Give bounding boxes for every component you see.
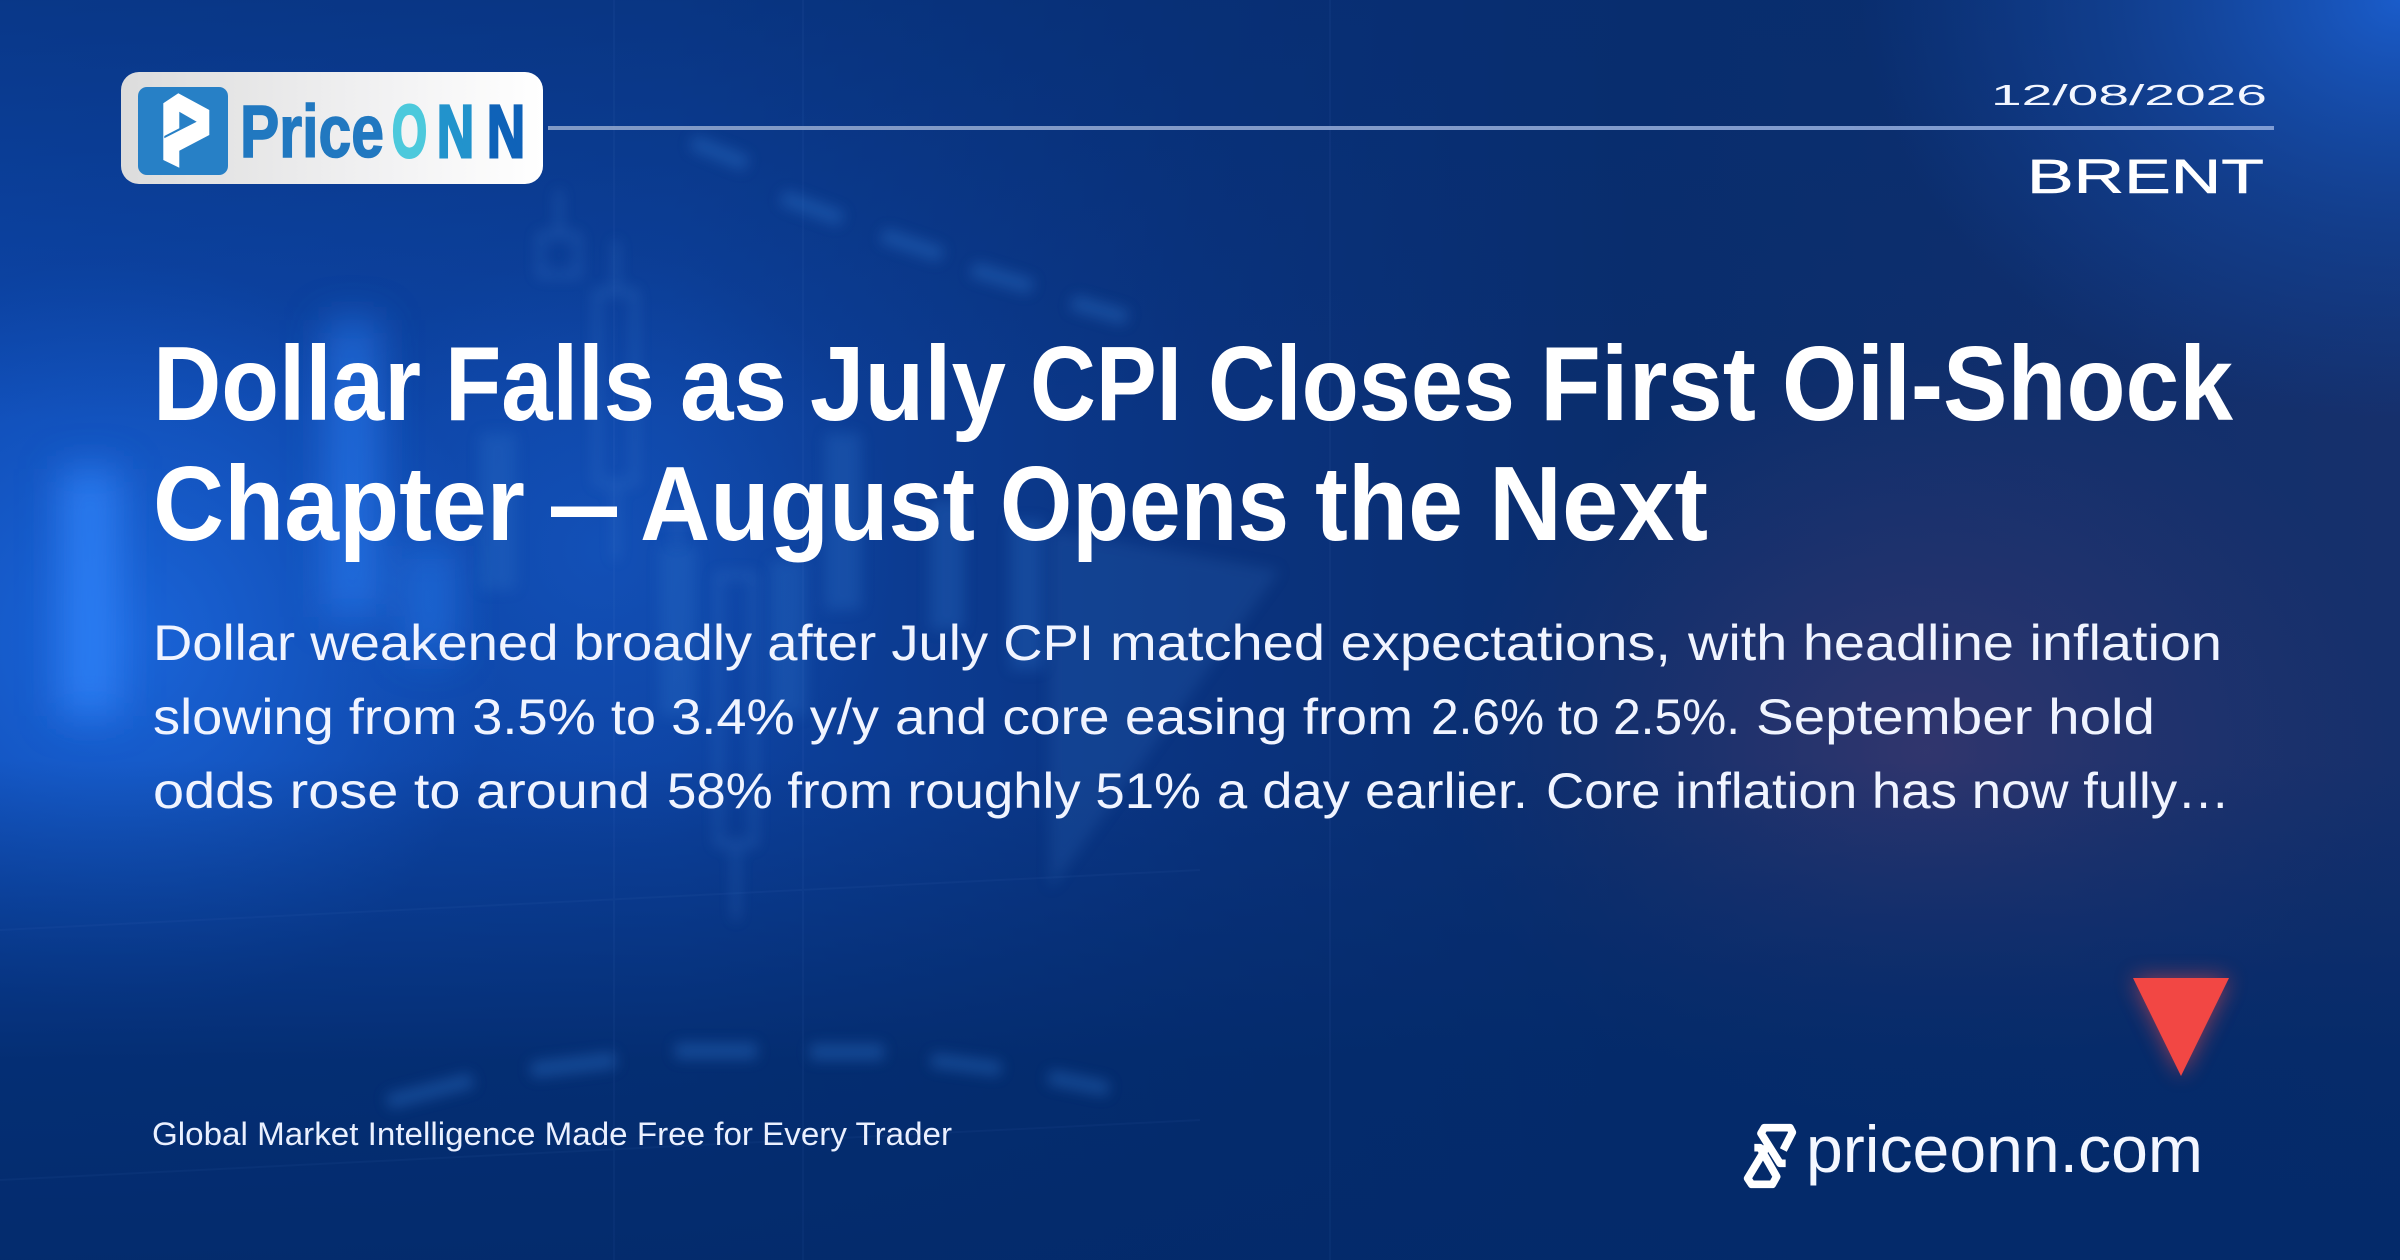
title: Dollar xyxy=(153,325,421,443)
logo wordmark: Price xyxy=(240,90,384,173)
summary paragraph: odds rose to around xyxy=(153,763,650,819)
title: Opens xyxy=(1000,445,1289,563)
title: the xyxy=(1315,445,1463,563)
summary paragraph: matched expectations, xyxy=(1110,615,1671,671)
date: 12/08/2026 xyxy=(1991,80,2267,112)
tagline: Global Market Intelligence Made Free for Every Trader xyxy=(152,1116,952,1152)
logo wordmark xyxy=(240,90,525,173)
summary paragraph: 58% from roughly 51% xyxy=(667,763,1201,819)
logo wordmark: N xyxy=(437,90,474,173)
logo wordmark: O xyxy=(392,90,427,173)
summary paragraph: with headline inflation xyxy=(1687,615,2222,671)
logo wordmark: N xyxy=(487,90,525,173)
symbol BRENT: BRENT xyxy=(2027,151,2264,204)
summary paragraph: Core inflation has now fully… xyxy=(1546,763,2230,819)
summary paragraph: slowing from 3.5% to 3.4% y/y xyxy=(153,689,879,745)
website: priceonn.com xyxy=(1806,1112,2203,1186)
title: Closes xyxy=(1208,325,1515,443)
summary paragraph: and core easing from xyxy=(895,689,1413,745)
title: First xyxy=(1540,325,1756,443)
header rule xyxy=(548,126,2274,130)
title: August xyxy=(640,445,975,563)
summary paragraph: September hold xyxy=(1756,689,2155,745)
title: July xyxy=(810,325,1006,443)
summary paragraph: Dollar weakened broadly after July CPI xyxy=(153,615,1094,671)
title: Chapter xyxy=(153,445,525,563)
title xyxy=(153,325,2234,563)
summary paragraph: a day earlier. xyxy=(1217,763,1528,819)
summary paragraph xyxy=(153,615,2230,819)
title: Falls xyxy=(445,325,655,443)
icon: logo mark xyxy=(138,87,228,175)
title: Oil-Shock xyxy=(1782,325,2234,443)
summary paragraph: 2.6% to 2.5%. xyxy=(1431,689,1740,745)
title: Next xyxy=(1489,445,1708,563)
logo badge xyxy=(121,72,543,184)
title: — xyxy=(551,445,617,563)
title: CPI xyxy=(1030,325,1182,443)
title: as xyxy=(680,325,787,443)
